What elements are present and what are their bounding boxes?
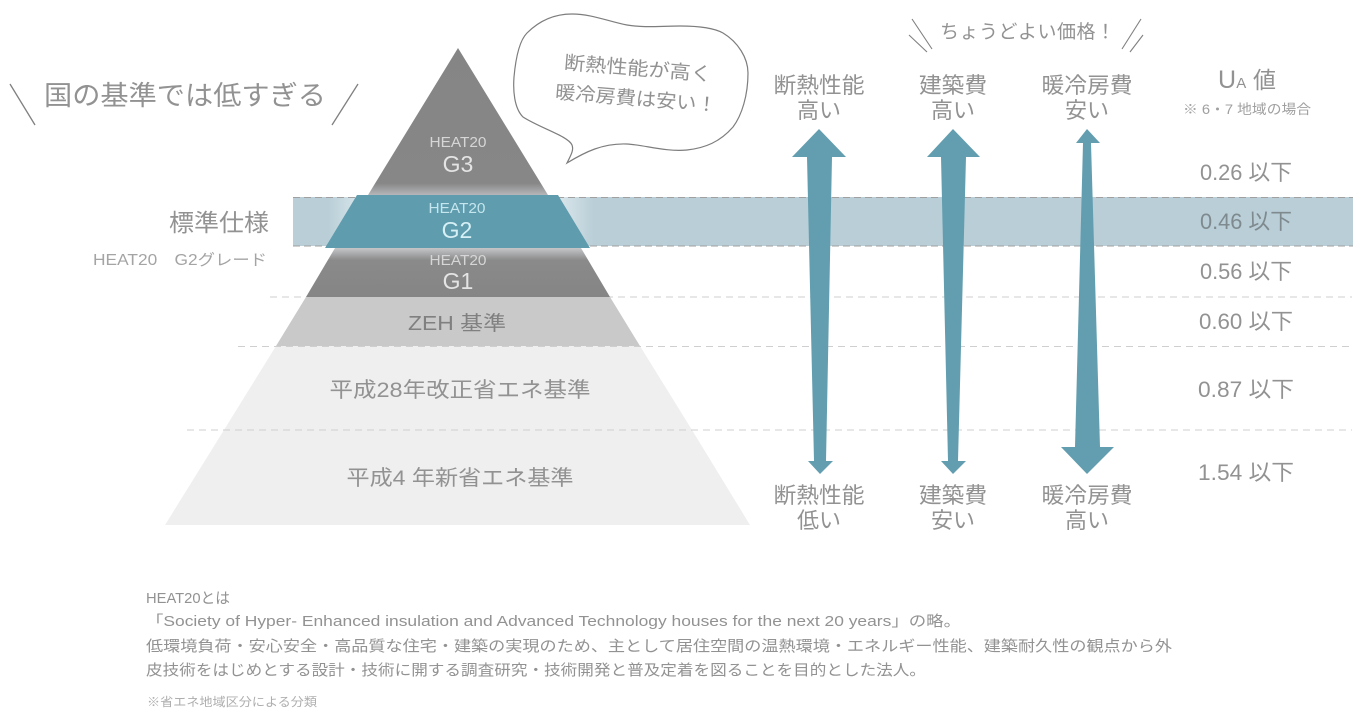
column head: UA value (1183, 66, 1312, 117)
column head: insulation high: 断熱性能 (774, 73, 864, 98)
pyramid label: G1: G1 (443, 268, 473, 294)
callout: just right price (909, 19, 1143, 52)
pyramid tier: G1 (306, 248, 610, 297)
column foot: insulation low: 断熱性能 (774, 483, 864, 508)
pyramid label: ZEH: ZEH 基準 (408, 312, 506, 335)
UA values: 1.54 以下 (1198, 460, 1294, 485)
pyramid tier: H4 standard (165, 430, 750, 525)
column foot: insulation low: 低い (797, 508, 841, 533)
pyramid label: G2 (428, 201, 486, 243)
arrow: insulation (792, 129, 846, 474)
standard specification label: HEAT20 G2グレード (93, 251, 267, 269)
column head: construction cost high: 高い (931, 98, 975, 123)
column head: UA value: UA 値 (1218, 66, 1276, 94)
column foot: insulation low (774, 483, 864, 533)
pyramid tier: H28 standard (224, 346, 692, 430)
UA values: 0.87 以下 (1198, 377, 1294, 402)
UA values: 0.56 以下 (1200, 259, 1292, 284)
heading: national standard too low: 国の基準では低すぎる (44, 81, 326, 111)
dashed level line at G1 (270, 296, 1352, 298)
description: what is HEAT20: 低環境負荷・安心安全・高品質な住宅・建築の実現のため、主として居住空間の温熱環境・エネルギー性能、建築耐久性の観点から外 (146, 637, 1172, 655)
pyramid tier: ZEH (276, 297, 640, 346)
column head: insulation high (774, 73, 864, 123)
pyramid label: H4: 平成4 年新省エネ基準 (346, 467, 574, 490)
pyramid tier: G3 (368, 48, 548, 195)
heading: national standard too low (10, 81, 358, 125)
pyramid label: G3 (430, 135, 486, 177)
UA values (1198, 160, 1294, 485)
column head: insulation high: 高い (797, 98, 841, 123)
pyramid label: G1: HEAT20 (430, 253, 486, 269)
pyramid label: G2: G2 (442, 217, 472, 243)
callout: just right price: ちょうどよい価格！ (940, 21, 1115, 43)
column foot: construction cost low (919, 483, 987, 533)
column head: construction cost high (919, 73, 987, 123)
description: what is HEAT20: 皮技術をはじめとする設計・技術に開する調査研究・技術開発と普及定着を図ることを目的とした法人。 (146, 662, 926, 679)
description: what is HEAT20: HEAT20とは (146, 590, 230, 607)
pyramid label: G3: G3 (443, 151, 473, 177)
column foot: construction cost low: 安い (931, 508, 975, 533)
description: what is HEAT20 (146, 590, 1172, 679)
description: what is HEAT20: 「Society of Hyper- Enhanced insulation and Advanced Technology houses for the next 20 years」の略。 (146, 613, 961, 630)
arrow: construction cost (927, 129, 980, 474)
column foot: heating cost high: 暖冷房費 (1042, 483, 1132, 508)
dashed level lines over pyramid (187, 346, 1352, 430)
standard specification label (93, 210, 269, 269)
highlight band: standard specification (293, 197, 1353, 246)
arrow: heating cost (1061, 129, 1114, 474)
pyramid label: G3: HEAT20 (430, 135, 486, 151)
pyramid label: H28: 平成28年改正省エネ基準 (330, 379, 590, 402)
UA values: 0.46 以下 (1200, 209, 1292, 234)
UA values: 0.26 以下 (1200, 160, 1292, 185)
pyramid (165, 48, 750, 525)
speech bubble: 暖冷房費は安い！ (554, 81, 718, 117)
column foot: heating cost high: 高い (1065, 508, 1109, 533)
pyramid label: G1 (430, 253, 486, 294)
column head: heating cost low (1042, 73, 1132, 123)
column head: construction cost high: 建築費 (919, 73, 987, 98)
speech bubble (514, 14, 748, 163)
pyramid tier: G2 highlighted (325, 195, 590, 248)
column foot: heating cost high (1042, 483, 1132, 533)
speech bubble: 断熱性能が高く (563, 52, 713, 86)
column head: heating cost low: 安い (1065, 98, 1109, 123)
column head: heating cost low: 暖冷房費 (1042, 73, 1132, 98)
pyramid label: G2: HEAT20 (428, 201, 486, 217)
column foot: construction cost low: 建築費 (919, 483, 987, 508)
standard specification label: 標準仕様 (169, 210, 269, 237)
footnote: ※省エネ地域区分による分類 (147, 695, 317, 709)
column head: UA value: ※ 6・7 地域の場合 (1183, 102, 1312, 117)
UA values: 0.60 以下 (1199, 309, 1293, 334)
